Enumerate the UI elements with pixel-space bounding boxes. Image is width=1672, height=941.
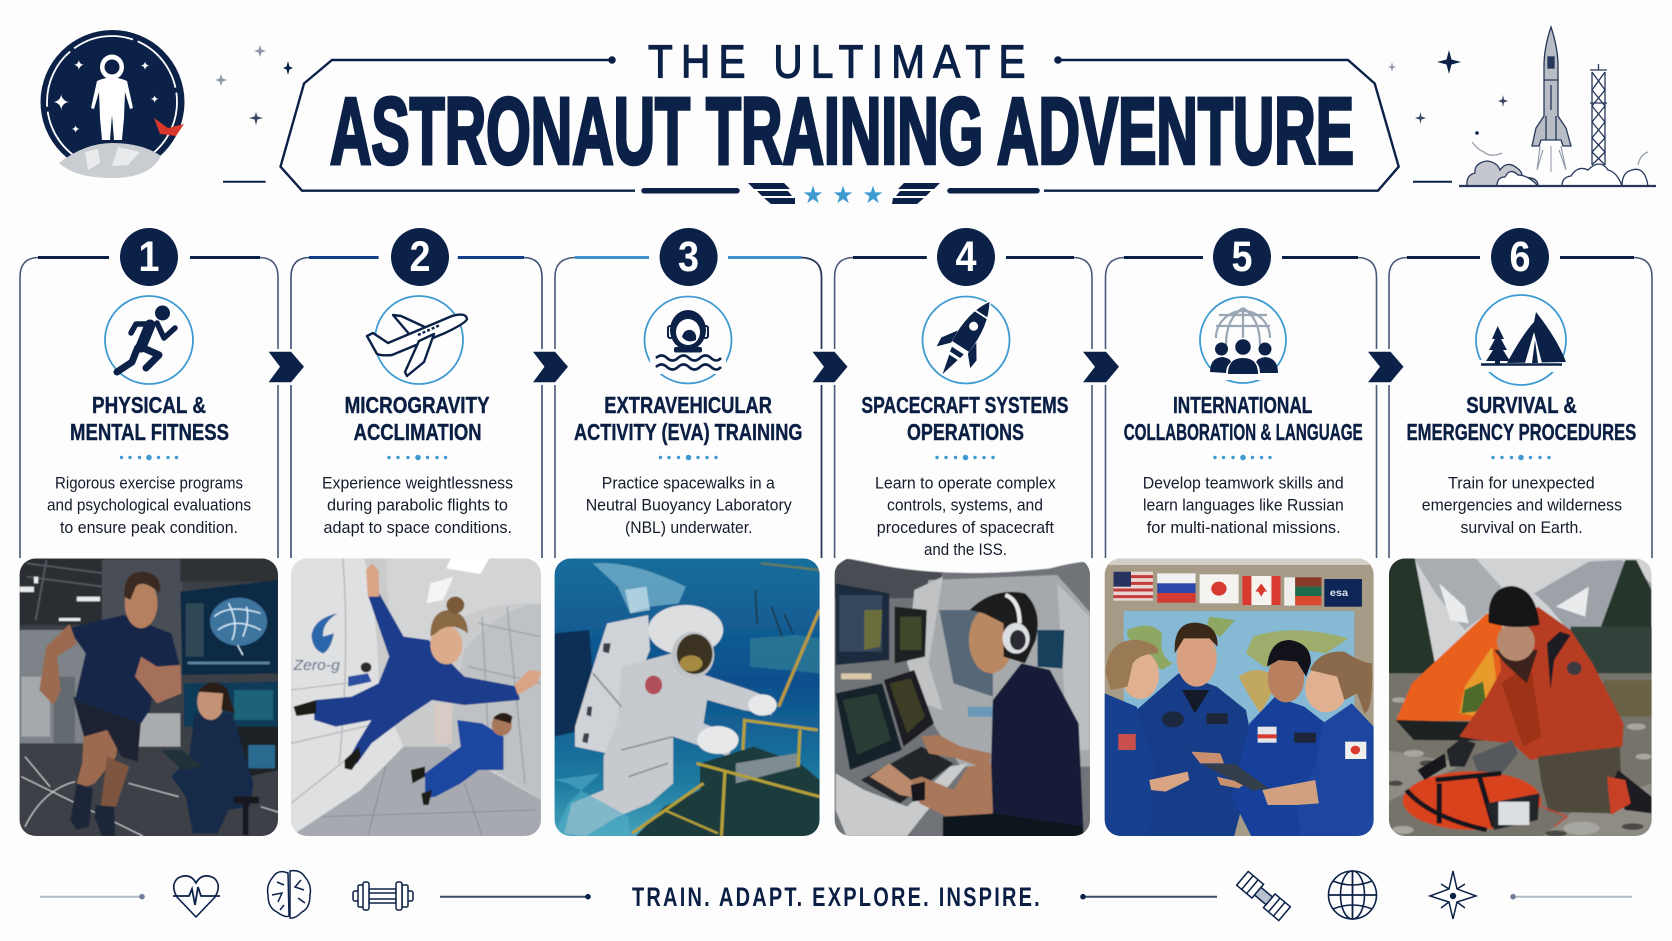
icon: airplane bbox=[367, 296, 467, 384]
step 3 description: Practice spacewalks in a bbox=[602, 474, 776, 492]
step 3 description: Neutral Buoyancy Laboratory bbox=[586, 497, 792, 515]
step 4 description: Learn to operate complex bbox=[875, 474, 1056, 492]
decorative stars left bbox=[215, 45, 293, 125]
step 6 number bbox=[1491, 228, 1549, 286]
step 3 description: (NBL) underwater. bbox=[625, 519, 752, 537]
step 1 description bbox=[47, 474, 251, 537]
step 2 number: 2 bbox=[410, 233, 430, 281]
step 2 heading: ACCLIMATION bbox=[354, 419, 482, 445]
step 1 heading: MENTAL FITNESS bbox=[70, 419, 229, 445]
step 5 heading: INTERNATIONAL bbox=[1173, 392, 1312, 418]
icon: brain bbox=[268, 871, 310, 918]
footer line right bbox=[1510, 894, 1632, 900]
step 3 description bbox=[586, 474, 792, 537]
step 2 photo: zero-g flight cabin: Zero-g bbox=[293, 657, 340, 674]
header logo badge bbox=[40, 30, 184, 178]
footer line center right bbox=[1080, 894, 1217, 900]
step 4 description: procedures of spacecraft bbox=[877, 519, 1054, 537]
header logo badge: ✦ bbox=[71, 124, 80, 136]
step 5 description: for multi-national missions. bbox=[1147, 519, 1341, 537]
icon: wire globe bbox=[1328, 871, 1376, 919]
step 3 panel bbox=[550, 228, 825, 840]
step 5 description: learn languages like Russian bbox=[1143, 497, 1344, 515]
chevron arrow 3 bbox=[811, 349, 849, 385]
astronaut figure bbox=[91, 54, 133, 140]
icon: tent and tree bbox=[1476, 295, 1566, 385]
header logo badge: ✦ bbox=[140, 59, 150, 73]
step 5 frame bbox=[1106, 258, 1376, 558]
step 5 dots bbox=[1213, 455, 1272, 460]
step 6 photo: wilderness survival with tent bbox=[1385, 553, 1658, 840]
step 6 heading bbox=[1406, 392, 1636, 445]
step 6 heading: SURVIVAL & bbox=[1466, 392, 1577, 418]
footer tagline: TRAIN. ADAPT. EXPLORE. INSPIRE. bbox=[632, 882, 1040, 913]
step 1 dots bbox=[120, 455, 178, 460]
step 3 heading: ACTIVITY (EVA) TRAINING bbox=[574, 419, 802, 445]
step 2 panel bbox=[286, 228, 546, 840]
icon: dumbbell bbox=[353, 882, 413, 910]
step 5 number: 5 bbox=[1232, 233, 1252, 281]
step 5 heading bbox=[1124, 392, 1363, 445]
step 2 heading: MICROGRAVITY bbox=[345, 392, 490, 418]
step 5 photo: international crew at world map: esa bbox=[1330, 588, 1348, 599]
step 5 description: Develop teamwork skills and bbox=[1143, 474, 1344, 492]
icon: runner bbox=[105, 296, 193, 384]
step 2 photo: zero-g flight cabin bbox=[286, 553, 546, 840]
step 4 description bbox=[875, 474, 1056, 559]
step 4 heading: SPACECRAFT SYSTEMS bbox=[861, 392, 1068, 418]
title frame bbox=[223, 57, 1452, 191]
step 1 description: to ensure peak condition. bbox=[60, 519, 238, 537]
title ornament stars and stripes: ★ bbox=[802, 182, 824, 209]
step 2 description: adapt to space conditions. bbox=[324, 519, 512, 537]
step 6 description: survival on Earth. bbox=[1460, 519, 1583, 537]
step 3 heading: EXTRAVEHICULAR bbox=[604, 392, 772, 418]
step 6 dots bbox=[1491, 455, 1551, 460]
step 1 heading bbox=[70, 392, 229, 445]
step 2 frame bbox=[291, 258, 542, 558]
step 1 frame bbox=[20, 258, 278, 558]
footer line left bbox=[40, 894, 145, 900]
step 6 number: 6 bbox=[1510, 233, 1530, 281]
title ornament stars and stripes: ★ bbox=[862, 182, 884, 209]
step 1 photo: athlete running with brain monitor bbox=[14, 553, 286, 840]
step 4 heading: OPERATIONS bbox=[907, 419, 1024, 445]
step 4 frame bbox=[835, 258, 1092, 558]
header logo badge: ✦ bbox=[73, 57, 85, 73]
icon: heart with pulse bbox=[173, 876, 220, 917]
chevron arrow 4 bbox=[1082, 349, 1120, 385]
step 3 photo: underwater spacewalk training bbox=[550, 553, 825, 840]
icon: compass star bbox=[1430, 871, 1476, 919]
step 2 description bbox=[322, 474, 513, 537]
step 4 dots bbox=[935, 455, 995, 460]
step 4 panel bbox=[829, 228, 1096, 840]
step 3 heading bbox=[574, 392, 802, 445]
rocket launch illustration bbox=[1459, 27, 1656, 186]
step 5 panel bbox=[1100, 228, 1381, 840]
step 5 description bbox=[1143, 474, 1344, 537]
step 1 heading: PHYSICAL & bbox=[92, 392, 206, 418]
icon: satellite station bbox=[1237, 871, 1290, 921]
chevron arrow 1 bbox=[267, 349, 305, 385]
exhaust clouds bbox=[1467, 161, 1538, 186]
chevron arrow 5 bbox=[1366, 349, 1406, 385]
step 5 heading: COLLABORATION & LANGUAGE bbox=[1124, 419, 1363, 445]
step 3 frame bbox=[555, 258, 822, 558]
title ornament stars and stripes bbox=[748, 182, 940, 209]
title line one: THE ULTIMATE bbox=[648, 37, 1026, 88]
chevron arrow 2 bbox=[532, 349, 570, 385]
step 1 panel bbox=[14, 228, 286, 840]
footer line center left bbox=[440, 894, 591, 900]
icon: rocket bbox=[922, 290, 1010, 386]
step 6 description: Train for unexpected bbox=[1448, 474, 1595, 492]
step 2 heading bbox=[345, 392, 490, 445]
step 1 number bbox=[120, 228, 178, 286]
step 2 dots bbox=[387, 455, 447, 460]
step 4 heading bbox=[861, 392, 1068, 445]
step 4 description: controls, systems, and bbox=[887, 497, 1043, 515]
step 1 number: 1 bbox=[138, 233, 160, 281]
step 6 description: emergencies and wilderness bbox=[1422, 497, 1622, 515]
step 1 description: Rigorous exercise programs bbox=[55, 474, 243, 492]
decorative stars right bbox=[1388, 50, 1508, 135]
step 5 photo: international crew at world map bbox=[1100, 553, 1381, 840]
icon: diving helmet over waves bbox=[644, 296, 732, 384]
header logo badge: ✦ bbox=[52, 90, 70, 115]
step 4 photo: spacecraft console operator bbox=[829, 553, 1096, 840]
step 2 description: during parabolic flights to bbox=[327, 497, 508, 515]
step 6 panel bbox=[1385, 228, 1658, 840]
step 6 description bbox=[1422, 474, 1622, 537]
launch tower bbox=[1590, 64, 1607, 165]
step 4 number bbox=[937, 228, 995, 286]
step 2 number bbox=[391, 228, 449, 286]
icon: globe and team bbox=[1200, 297, 1286, 383]
step 4 description: and the ISS. bbox=[924, 541, 1007, 559]
step 2 description: Experience weightlessness bbox=[322, 474, 513, 492]
step 6 frame bbox=[1389, 258, 1652, 558]
step 4 number: 4 bbox=[956, 233, 977, 281]
step 3 number: 3 bbox=[678, 233, 699, 281]
title ornament stars and stripes: ★ bbox=[832, 182, 854, 209]
step 3 number bbox=[660, 228, 718, 286]
step 3 dots bbox=[659, 455, 718, 460]
step 5 number bbox=[1213, 228, 1271, 286]
header logo badge: ✦ bbox=[150, 94, 159, 106]
step 1 description: and psychological evaluations bbox=[47, 497, 251, 515]
